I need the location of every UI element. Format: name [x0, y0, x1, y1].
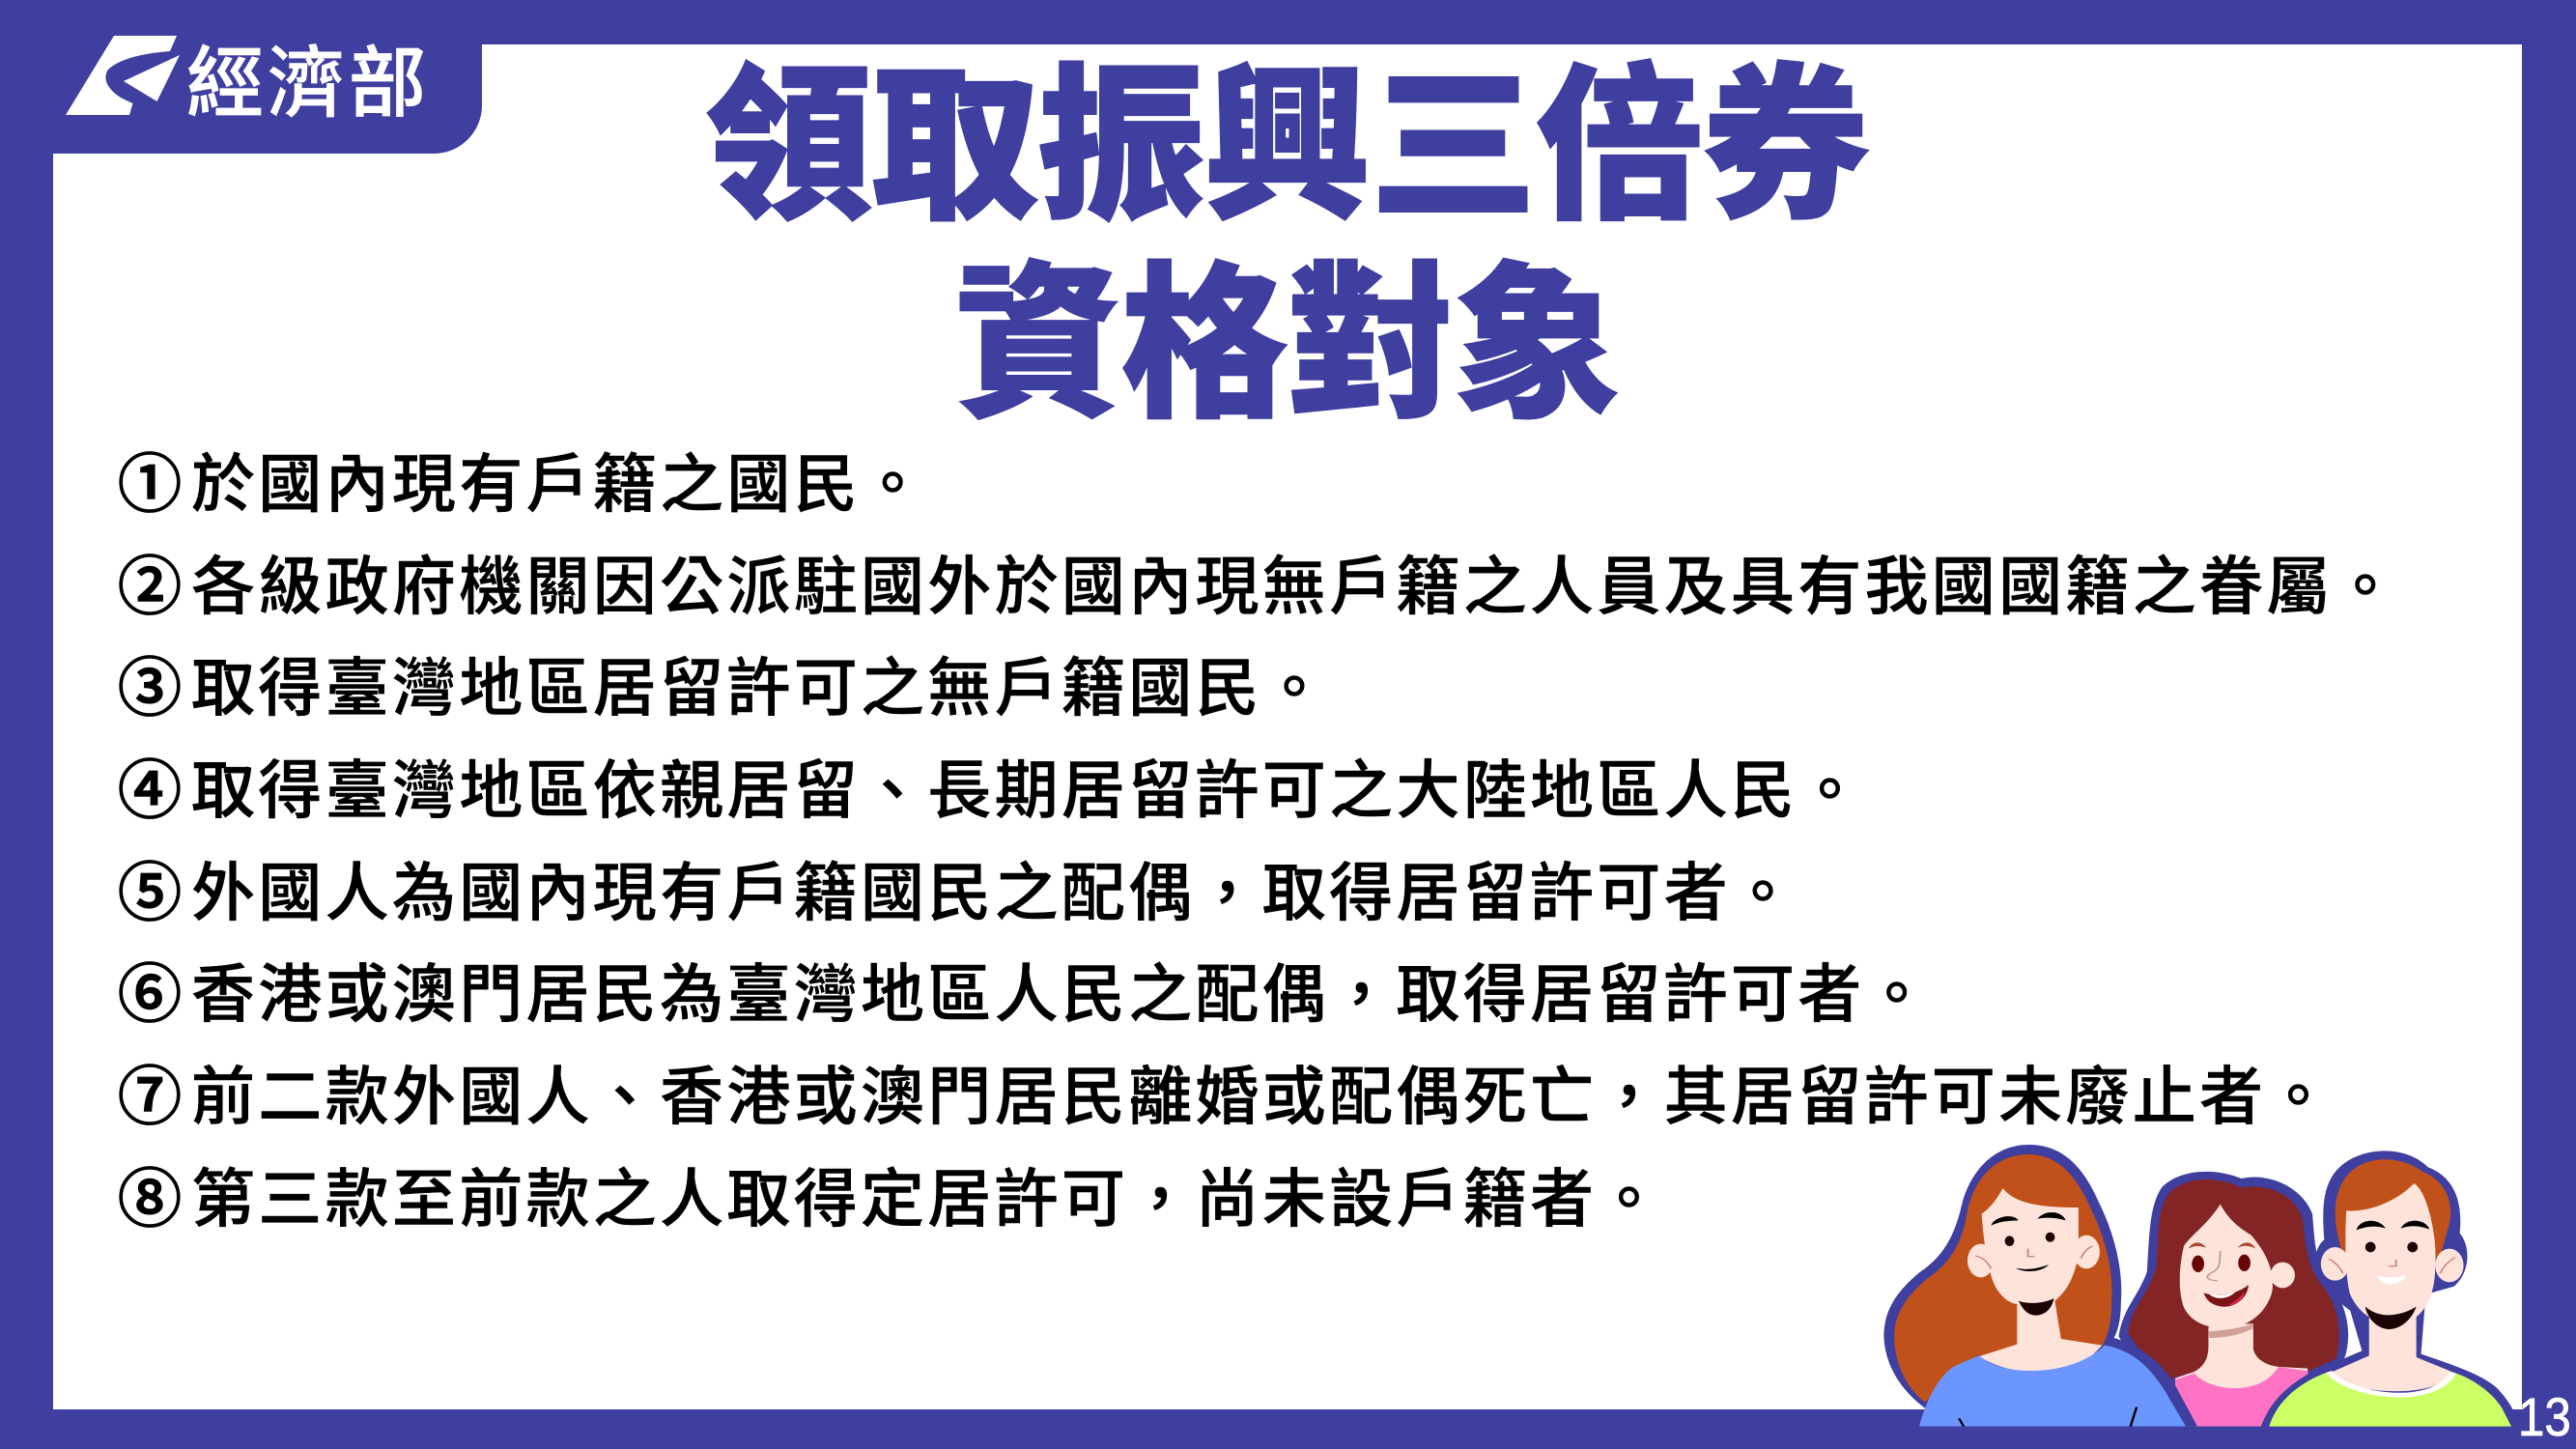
- bottom band: [1835, 1427, 2576, 1449]
- item 3: ③: [118, 637, 182, 729]
- page number: 13: [2518, 1386, 2571, 1447]
- figure: middle woman: [2118, 1172, 2348, 1427]
- title line 1: 領取振興三倍券: [705, 11, 1868, 254]
- list: eligibility items: [118, 433, 2400, 1240]
- title line 2: 資格對象: [954, 209, 1619, 452]
- figure: left woman: [1883, 1145, 2196, 1427]
- icon: ministry logo: [66, 36, 180, 115]
- illustration: three people: [1883, 1145, 2513, 1427]
- figure: right man: [2260, 1151, 2520, 1428]
- logo tab: [0, 0, 482, 154]
- item 2: ②: [118, 535, 182, 628]
- item 7: 前二款外國人、香港或澳門居民離婚或配偶死亡，其居留許可未廢止者。: [191, 1045, 2334, 1138]
- item 6: ⑥: [118, 943, 182, 1036]
- item 2: 各級政府機關因公派駐國外於國內現無戶籍之人員及具有我國國籍之眷屬。: [191, 535, 2400, 628]
- item 3: 取得臺灣地區居留許可之無戶籍國民。: [191, 637, 1329, 729]
- logo text: 經濟部: [186, 21, 430, 133]
- item 4: ④: [118, 739, 182, 832]
- item 7: ⑦: [118, 1045, 182, 1138]
- item 6: 香港或澳門居民為臺灣地區人民之配偶，取得居留許可者。: [191, 943, 1932, 1036]
- item 5: 外國人為國內現有戶籍國民之配偶，取得居留許可者。: [191, 841, 1798, 934]
- item 5: ⑤: [118, 841, 182, 934]
- item 1: 於國內現有戶籍之國民。: [191, 433, 927, 526]
- item 4: 取得臺灣地區依親居留、長期居留許可之大陸地區人民。: [191, 739, 1864, 832]
- item 8: 第三款至前款之人取得定居許可，尚未設戶籍者。: [191, 1148, 1664, 1240]
- item 8: ⑧: [118, 1148, 182, 1240]
- item 1: ①: [118, 433, 182, 526]
